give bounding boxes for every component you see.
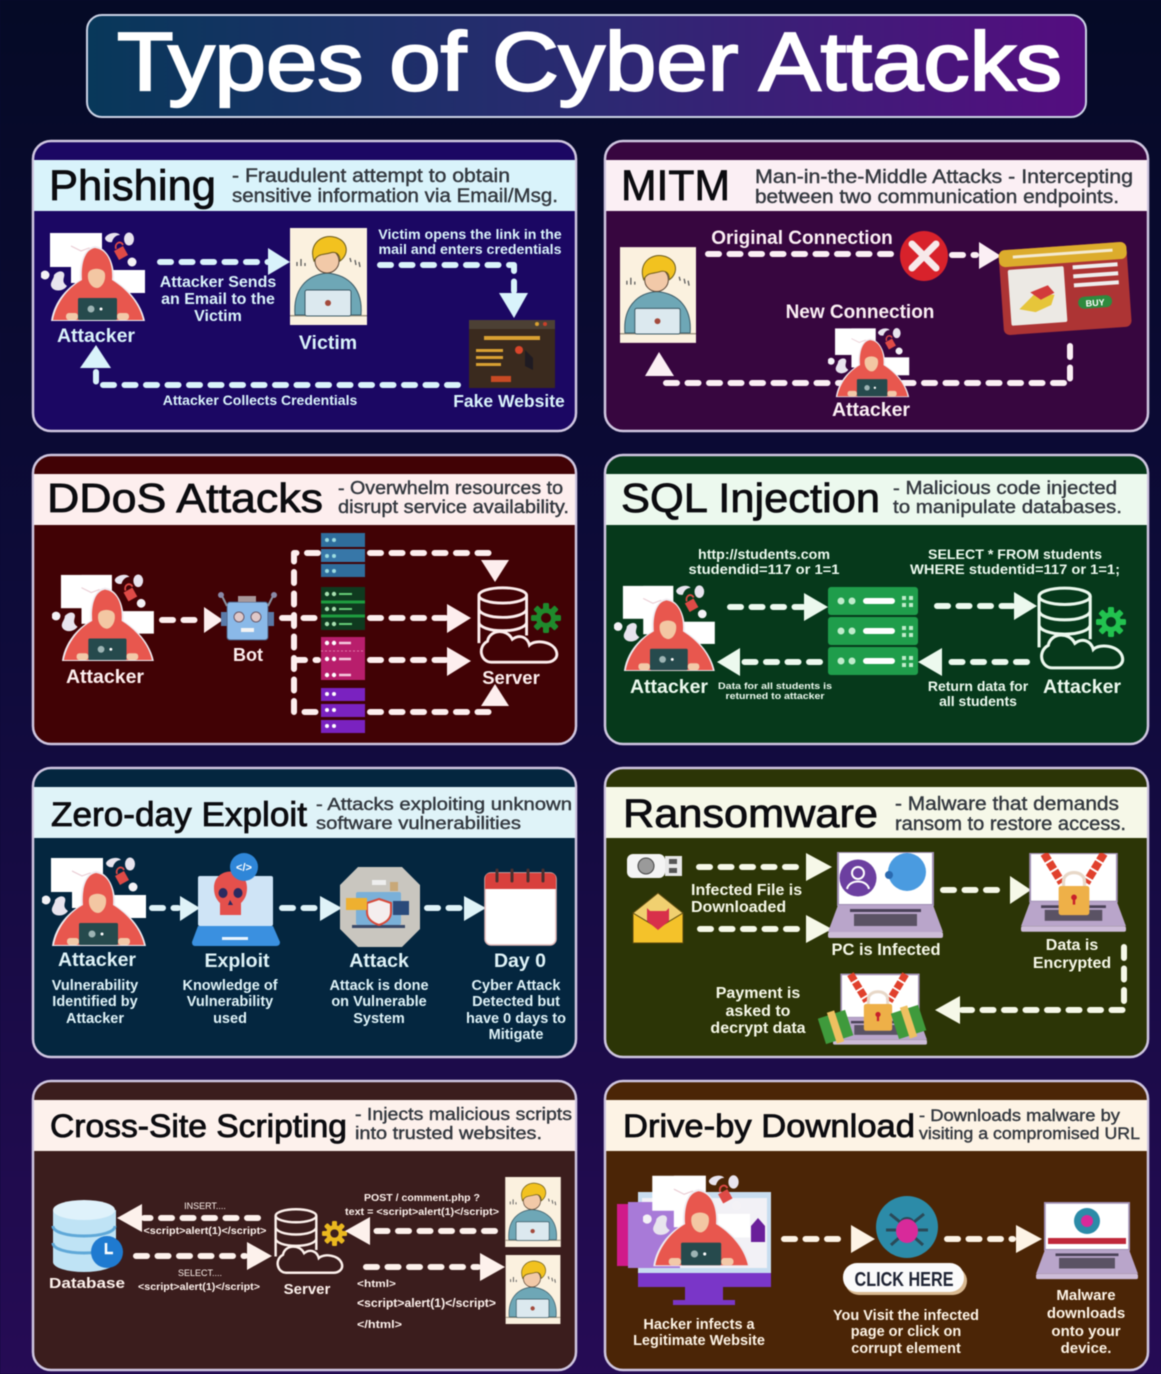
arrow: attacker relay xyxy=(645,346,1070,383)
arrow: user to server xyxy=(345,1217,495,1245)
icon: infected laptop xyxy=(828,852,943,938)
icon: user top xyxy=(505,1177,561,1247)
text: detected: have 0 days to xyxy=(466,1011,566,1027)
heading: DDoS Attacks: DDoS Attacks xyxy=(47,475,323,521)
code: POST request xyxy=(345,1193,499,1218)
panel: DDoS Attacks xyxy=(33,455,576,744)
arrow: server to database xyxy=(117,1204,258,1232)
label: hacker infects: Hacker infects a xyxy=(643,1317,756,1333)
label: malware downloads: device. xyxy=(1061,1340,1111,1357)
label: attacker sends email: an Email to the xyxy=(161,291,275,308)
label: SELECT: SELECT.... xyxy=(178,1268,222,1278)
button: click here xyxy=(843,1263,967,1295)
code: select script: <script>alert(1)</script> xyxy=(138,1281,260,1293)
label: victim opens link xyxy=(378,227,562,258)
icon: fake website xyxy=(469,320,555,388)
icon: attacker xyxy=(40,232,145,321)
label: Attack: Attack xyxy=(349,950,409,972)
icon: bot xyxy=(218,592,277,640)
description: MITM: Man-in-the-Middle Attacks - Intercepting xyxy=(755,167,1133,188)
label: return data xyxy=(928,678,1029,709)
text: knowledge used: used xyxy=(213,1011,247,1027)
code: html response xyxy=(357,1278,496,1331)
icon: server xyxy=(479,588,557,662)
label: hacker infects xyxy=(633,1317,765,1349)
label: SQL query: WHERE studentid=117 or 1=1; xyxy=(910,562,1120,577)
arrow: attacker to bot xyxy=(162,607,223,633)
label: Server: Server xyxy=(284,1281,331,1298)
label: attacker sends email: Attacker Sends xyxy=(160,274,276,291)
icon: infected website monitor xyxy=(617,1175,771,1305)
label: payment asked xyxy=(710,985,806,1037)
icon: victim xyxy=(290,228,367,325)
panel: Drive-by Download xyxy=(605,1081,1148,1370)
icon: infected laptop xyxy=(1036,1203,1138,1279)
label: Victim: Victim xyxy=(299,332,357,354)
description: XSS: - Injects malicious scripts xyxy=(355,1104,572,1124)
arrow: attacker to exploit xyxy=(152,896,200,921)
label: Attacker: Attacker xyxy=(832,399,910,421)
arrow: victim to fake website xyxy=(380,265,528,318)
icon: bug xyxy=(876,1196,938,1258)
text: detected: Detected but xyxy=(472,994,560,1010)
label: you visit: page or click on xyxy=(851,1324,961,1340)
icon: USB skull xyxy=(627,854,682,878)
arrow: attacker to server stack xyxy=(730,593,828,621)
panel: SQL Injection xyxy=(605,455,1148,744)
arrow: fake website to attacker xyxy=(80,345,458,385)
icon: encrypted laptop xyxy=(1021,853,1126,932)
text: vulnerability identified: Attacker xyxy=(66,1011,124,1027)
icon: server xyxy=(276,1209,342,1273)
heading: MITM: MITM xyxy=(621,162,730,210)
arrow: encrypted to payment xyxy=(935,947,1124,1024)
label: you visit xyxy=(833,1308,979,1357)
icon: calendar xyxy=(485,870,556,945)
label: payment asked: Payment is xyxy=(716,985,800,1002)
arrow: attacker to victim xyxy=(160,248,290,275)
panel: Phishing xyxy=(33,141,576,431)
title banner xyxy=(87,15,1086,117)
label: malware downloads: onto your xyxy=(1051,1323,1121,1340)
icon: web shop: BUY xyxy=(1085,297,1105,309)
label: Data is Encrypted: Data is xyxy=(1046,937,1098,954)
icon: exploit laptop xyxy=(192,853,280,946)
heading: Phishing: Phishing xyxy=(49,162,216,210)
icon: attacker xyxy=(42,858,146,946)
label: malware downloads: downloads xyxy=(1047,1305,1125,1322)
code: insert script: <script>alert(1)</script> xyxy=(144,1225,266,1237)
text: detected: Mitigate xyxy=(489,1027,543,1043)
description: SQL: - Malicious code injected xyxy=(893,478,1117,498)
button: click here: CLICK HERE xyxy=(854,1269,954,1291)
icon: victim xyxy=(620,247,696,343)
heading: Ransomware: Ransomware xyxy=(623,792,878,836)
arrow: server stack to database xyxy=(937,592,1037,620)
icon: database xyxy=(1039,588,1123,668)
panel: Zero-day Exploit: software vulnerabilities xyxy=(316,813,521,833)
description: Drive-by: - Downloads malware by xyxy=(919,1106,1121,1125)
heading: Drive-by Download: Drive-by Download xyxy=(623,1108,915,1144)
arrow: website to click xyxy=(784,1225,875,1253)
arrow: server stack to attacker xyxy=(717,648,820,676)
text: attack on system xyxy=(329,978,429,1027)
title: Types of Cyber Attacks xyxy=(117,15,1062,108)
icon: magenta servers xyxy=(321,637,365,680)
panel: Ransomware xyxy=(605,768,1148,1057)
label: infected file: Downloaded xyxy=(691,899,786,916)
label: victim opens link: mail and enters credentials xyxy=(379,242,562,258)
text: knowledge used: Knowledge of xyxy=(182,978,278,994)
text: attack on system: Attack is done xyxy=(329,978,429,994)
code: html response: </html> xyxy=(357,1319,402,1331)
icon: server stack xyxy=(828,587,918,675)
heading: Cross-Site Scripting: Cross-Site Scripting xyxy=(50,1108,347,1144)
icon: attacker xyxy=(52,574,154,661)
arrow: PC to encrypted xyxy=(943,876,1031,904)
label: INSERT: INSERT.... xyxy=(184,1201,226,1211)
label: request URL: studendid=117 or 1=1 xyxy=(688,562,840,577)
heading: SQL Injection: SQL Injection xyxy=(621,475,880,521)
label: Bot: Bot xyxy=(233,645,263,665)
code: html response: <script>alert(1)</script> xyxy=(357,1298,496,1310)
label: infected file: Infected File is xyxy=(691,882,802,899)
panel: DDoS Attacks: disrupt service availability. xyxy=(338,497,569,517)
label: request URL: http://students.com xyxy=(698,547,830,562)
label: Exploit: Exploit xyxy=(204,950,270,972)
label: Attacker: Attacker xyxy=(58,949,136,971)
icon: purple servers xyxy=(321,688,365,733)
arrow: email to PC xyxy=(700,915,832,943)
label: return data: all students xyxy=(939,693,1017,709)
label: infected file xyxy=(691,882,802,916)
icon: database xyxy=(53,1200,123,1272)
arrow: attack to day 0 xyxy=(427,896,486,921)
icon: gear xyxy=(322,1221,347,1246)
label: SQL query: SELECT * FROM students xyxy=(928,547,1102,562)
label: payment asked: asked to xyxy=(726,1003,791,1020)
text: detected: Cyber Attack xyxy=(472,978,561,994)
label: Attacker: Attacker xyxy=(57,325,135,347)
code: POST request: POST / comment.php ? xyxy=(364,1193,480,1204)
label: attacker sends email xyxy=(160,274,276,325)
panel: Drive-by Download: visiting a compromised URL xyxy=(919,1124,1140,1143)
code: html response: <html> xyxy=(357,1278,396,1290)
label: you visit: corrupt element xyxy=(851,1341,961,1357)
arrows: servers to target xyxy=(370,553,509,712)
label: Attacker: Attacker xyxy=(66,666,144,688)
label: hacker infects: Legitimate Website xyxy=(633,1333,765,1349)
label: data returned: returned to attacker xyxy=(726,691,825,702)
label: attacker sends email: Victim xyxy=(194,308,242,325)
description: Phishing: - Fraudulent attempt to obtain xyxy=(232,166,510,187)
icon: attack system xyxy=(340,867,420,947)
label: attacker collects credentials: Attacker Collects Credentials xyxy=(163,392,357,408)
text: vulnerability identified: Identified by xyxy=(52,994,138,1010)
icon: gear xyxy=(1096,607,1126,637)
arrow: click to download xyxy=(947,1225,1042,1253)
panel: Zero-day Exploit xyxy=(33,768,576,1057)
arrow: original connection xyxy=(708,242,1001,269)
text: vulnerability identified: Vulnerability xyxy=(52,978,138,994)
icon: infected envelope xyxy=(633,893,683,943)
description: DDoS: - Overwhelm resources to xyxy=(338,478,563,498)
label: payment asked: decrypt data xyxy=(710,1020,806,1037)
label: Database: Database xyxy=(49,1275,125,1292)
label: Attacker: Attacker xyxy=(1043,676,1121,698)
panel: Cross-Site Scripting: into trusted websites. xyxy=(355,1123,542,1143)
panel: MITM: between two communication endpoints. xyxy=(755,187,1119,208)
panel: MITM xyxy=(605,141,1148,431)
label: malware downloads: Malware xyxy=(1056,1287,1116,1304)
icon: blue servers xyxy=(321,533,365,577)
text: vulnerability identified xyxy=(52,978,138,1027)
panel: Ransomware: ransom to restore access. xyxy=(895,814,1126,835)
arrow: exploit to attack xyxy=(282,896,342,921)
text: attack on system: on Vulnerable xyxy=(331,994,427,1010)
icon: user bottom xyxy=(506,1255,560,1324)
arrow: USB to PC xyxy=(699,853,832,881)
text: knowledge used: Vulnerability xyxy=(187,994,273,1010)
description: Zero-day: - Attacks exploiting unknown xyxy=(316,794,572,814)
arrow: bot to servers xyxy=(282,553,318,712)
icon: web shop xyxy=(998,242,1132,335)
label: Server: Server xyxy=(482,667,540,688)
label: data returned xyxy=(718,681,832,702)
description: Ransomware: - Malware that demands xyxy=(895,794,1119,815)
label: you visit: You Visit the infected xyxy=(833,1308,979,1324)
heading: Zero-day Exploit: Zero-day Exploit xyxy=(51,796,308,834)
icon: attacker xyxy=(828,328,909,397)
label: request URL xyxy=(688,547,840,577)
icon: ransom laptop xyxy=(818,974,927,1045)
label: Data is Encrypted xyxy=(1033,937,1111,972)
panel: Cross-Site Scripting xyxy=(33,1081,576,1370)
icon: exploit laptop: </> xyxy=(236,862,252,874)
code: POST request: text = <script>alert(1)</script> xyxy=(345,1207,499,1218)
label: New Connection: New Connection xyxy=(786,302,934,323)
label: Attacker: Attacker xyxy=(630,676,708,698)
label: data returned: Data for all students is xyxy=(718,681,832,692)
label: Day 0: Day 0 xyxy=(494,950,546,972)
label: Data is Encrypted: Encrypted xyxy=(1033,955,1111,972)
label: victim opens link: Victim opens the link in the xyxy=(378,227,562,243)
text: knowledge used xyxy=(182,978,278,1027)
text: attack on system: System xyxy=(353,1011,405,1027)
label: SQL query xyxy=(910,547,1120,577)
icon: attacker xyxy=(614,585,715,671)
label: Fake Website: Fake Website xyxy=(453,391,565,411)
arrow: database to server stack xyxy=(918,648,1027,676)
panel: Phishing: sensitive information via Email/Msg. xyxy=(232,186,558,207)
label: return data: Return data for xyxy=(928,678,1029,694)
label: malware downloads xyxy=(1047,1287,1125,1357)
text: detected xyxy=(466,978,566,1043)
icon: gear xyxy=(531,603,561,633)
panel: SQL Injection: to manipulate databases. xyxy=(893,497,1122,517)
icon: blocked X xyxy=(900,231,948,281)
arrow: database to server xyxy=(136,1242,272,1270)
label: PC is Infected: PC is Infected xyxy=(831,941,941,959)
label: Original Connection: Original Connection xyxy=(711,228,893,249)
arrow: server to user xyxy=(366,1253,505,1281)
icon: green servers xyxy=(321,587,365,630)
